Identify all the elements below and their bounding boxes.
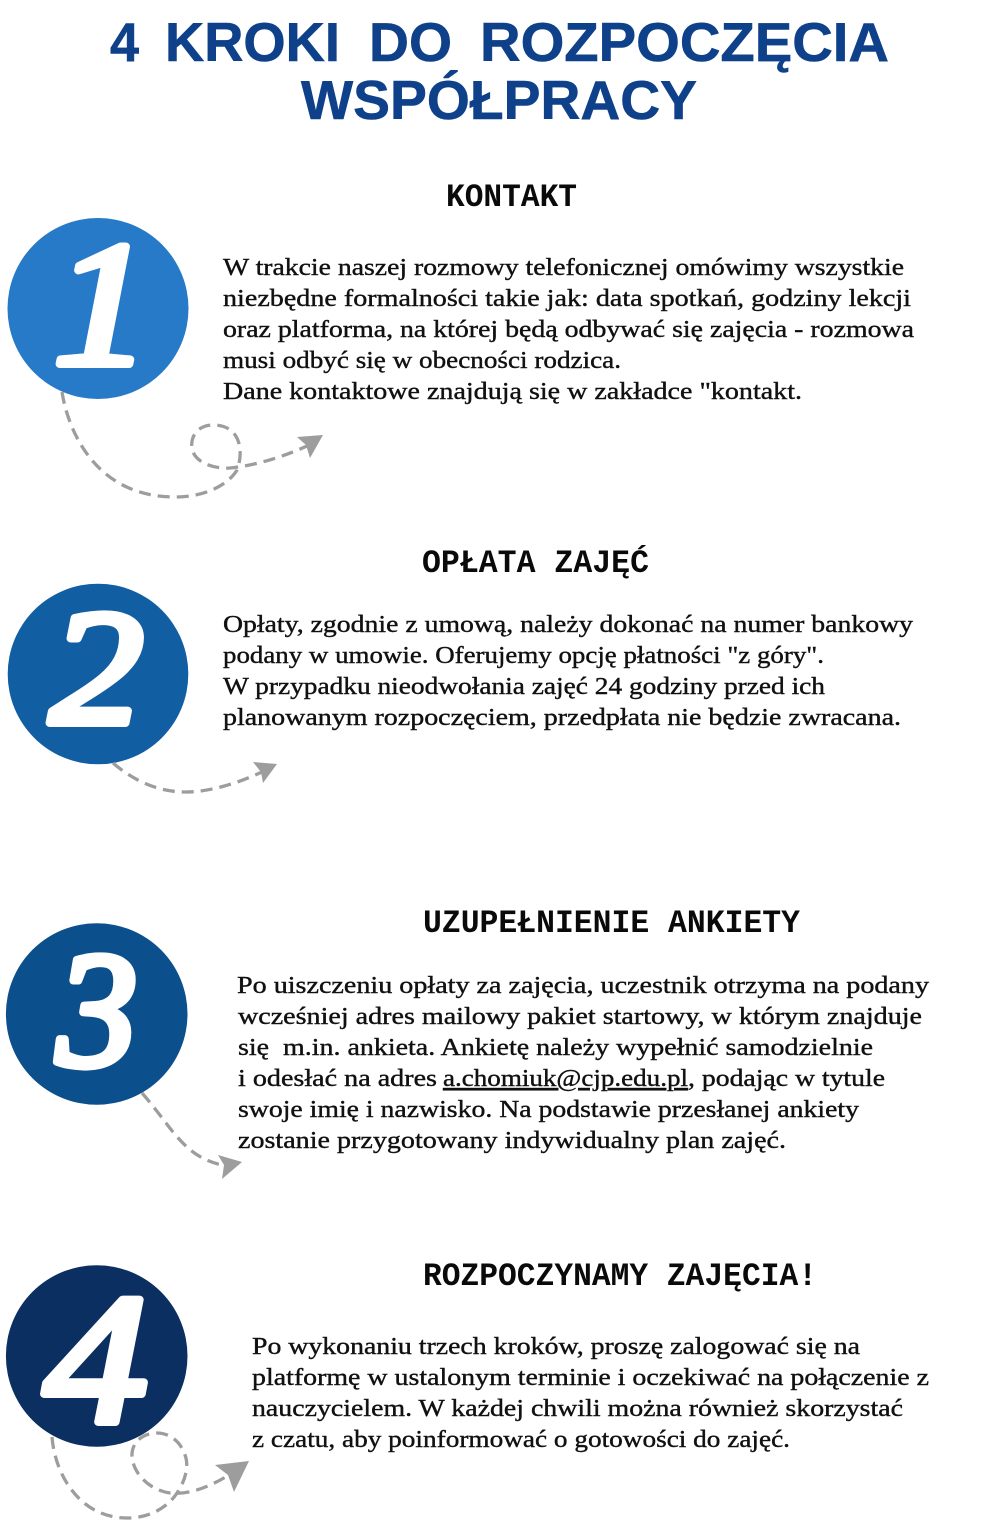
text block: payment details: Opłaty, zgodnie z umową, należy dokonać na numer bankowy: [223, 612, 913, 638]
heading: rozpoczynamy zajęcia: ROZPOCZYNAMY ZAJĘCIA!: [423, 1258, 817, 1295]
text block: start details: nauczycielem. W każdej chwili można również skorzystać: [252, 1396, 903, 1422]
title: WSPÓŁPRACY: [301, 69, 697, 131]
heading: kontakt: KONTAKT: [446, 179, 577, 216]
heading: opłata zajęć: OPŁATA ZAJĘĆ: [422, 544, 649, 582]
heading: uzupełnienie ankiety: UZUPEŁNIENIE ANKIETY: [423, 905, 800, 942]
text block: start details: Po wykonaniu trzech kroków, proszę zalogować się na: [252, 1334, 860, 1360]
title: DO: [369, 11, 452, 73]
arrow: step 3 dashed arrow: [142, 1093, 242, 1179]
icon: number 4 circle: 4: [44, 1256, 148, 1463]
text block: start details: z czatu, aby poinformować o gotowości do zajęć.: [252, 1427, 790, 1453]
text block: survey details: a.chomiuk@cjp.edu.pl: [443, 1066, 688, 1092]
text block: survey details: i odesłać na adres: [238, 1066, 437, 1092]
text block: survey details: zostanie przygotowany indywidualny plan zajęć.: [238, 1128, 786, 1154]
icon: number 2 circle: 2: [50, 578, 143, 759]
title: KROKI: [165, 11, 340, 73]
title: [110, 11, 889, 131]
text block: contact details: [223, 255, 914, 405]
icon: number 4 circle: [6, 1256, 188, 1463]
text block: payment details: W przypadku nieodwołania zajęć 24 godziny przed ich: [223, 674, 825, 700]
title: ROZPOCZĘCIA: [480, 11, 889, 73]
arrow: step 1 looped dashed arrow: [62, 392, 323, 497]
text block: survey details: się m.in. ankieta. Ankietę należy wypełnić samodzielnie: [238, 1035, 873, 1061]
panel: step 4 start classes: [6, 1256, 929, 1518]
text block: contact details: oraz platforma, na której będą odbywać się zajęcia - rozmowa: [223, 317, 914, 343]
icon: number 3 circle: 3: [56, 920, 137, 1101]
text block: survey details: Po uiszczeniu opłaty za zajęcia, uczestnik otrzyma na podany: [237, 973, 929, 999]
title: 4: [110, 11, 139, 73]
arrow: step 2 dashed arrow: [113, 762, 277, 792]
icon: number 3 circle: [6, 920, 188, 1105]
text block: contact details: musi odbyć się w obecności rodzica.: [223, 348, 621, 374]
text block: survey details: , podając w tytule: [688, 1066, 885, 1092]
panel: step 3 survey: [6, 905, 929, 1179]
arrow: step 4 looped dashed arrow: [52, 1433, 249, 1518]
text block: start details: [252, 1334, 929, 1453]
text block: contact details: niezbędne formalności takie jak: data spotkań, godziny lekcji: [223, 286, 911, 312]
text block: survey details: [237, 973, 929, 1154]
text block: payment details: planowanym rozpoczęciem, przedpłata nie będzie zwracana.: [223, 705, 901, 731]
icon: number 1 circle: [8, 206, 188, 403]
panel: step 1 contact: [8, 179, 914, 497]
text block: contact details: W trakcie naszej rozmowy telefonicznej omówimy wszystkie: [223, 255, 904, 281]
text block: payment details: [223, 612, 913, 731]
text block: survey details: wcześniej adres mailowy pakiet startowy, w którym znajduje: [238, 1004, 922, 1030]
text block: start details: platformę w ustalonym terminie i oczekiwać na połączenie z: [252, 1365, 929, 1391]
text block: contact details: Dane kontaktowe znajdują się w zakładce "kontakt.: [223, 379, 802, 405]
icon: number 2 circle: [8, 578, 188, 764]
icon: number 1 circle: 1: [53, 206, 151, 403]
panel: step 2 payment: [8, 544, 913, 792]
text block: payment details: podany w umowie. Oferujemy opcję płatności "z góry".: [223, 643, 824, 669]
text block: survey details: swoje imię i nazwisko. Na podstawie przesłanej ankiety: [238, 1097, 859, 1123]
